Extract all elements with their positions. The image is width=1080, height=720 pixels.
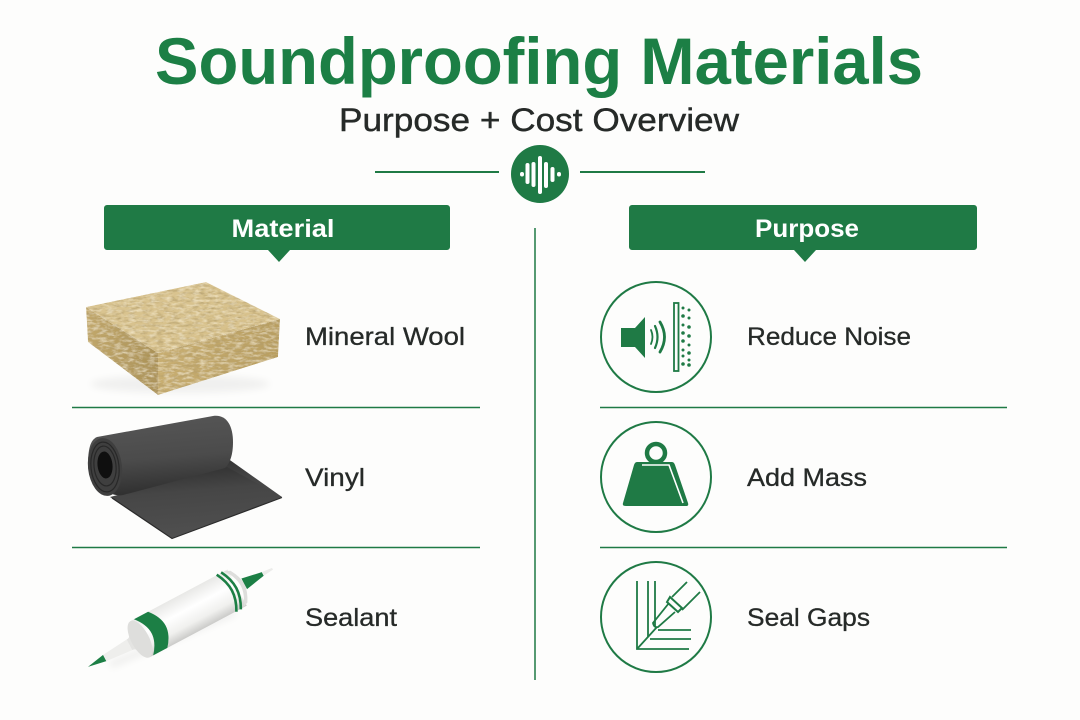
central column divider	[534, 228, 536, 680]
subtitle: Purpose + Cost Overview	[339, 102, 740, 138]
header: Material: Material	[232, 215, 334, 243]
header: Purpose	[629, 205, 977, 262]
icon: reduce noise	[601, 282, 711, 392]
image: vinyl roll	[85, 416, 282, 538]
label: Seal Gaps: Seal Gaps	[747, 604, 870, 632]
label: Sealant: Sealant	[305, 604, 397, 632]
label: Vinyl: Vinyl	[305, 464, 365, 492]
icon: add mass weight	[601, 422, 711, 532]
title: Soundproofing Materials	[155, 24, 923, 98]
header: Material	[104, 205, 450, 262]
title divider with sound wave badge	[375, 145, 705, 203]
header: Purpose: Purpose	[755, 215, 859, 243]
row dividers	[72, 408, 1007, 548]
label: Reduce Noise: Reduce Noise	[747, 323, 911, 351]
label: Mineral Wool: Mineral Wool	[305, 323, 465, 351]
label: Add Mass: Add Mass	[747, 464, 867, 492]
image: sealant tube	[78, 550, 282, 685]
image: mineral wool block	[86, 282, 280, 395]
icon: seal gaps corner	[601, 562, 711, 672]
